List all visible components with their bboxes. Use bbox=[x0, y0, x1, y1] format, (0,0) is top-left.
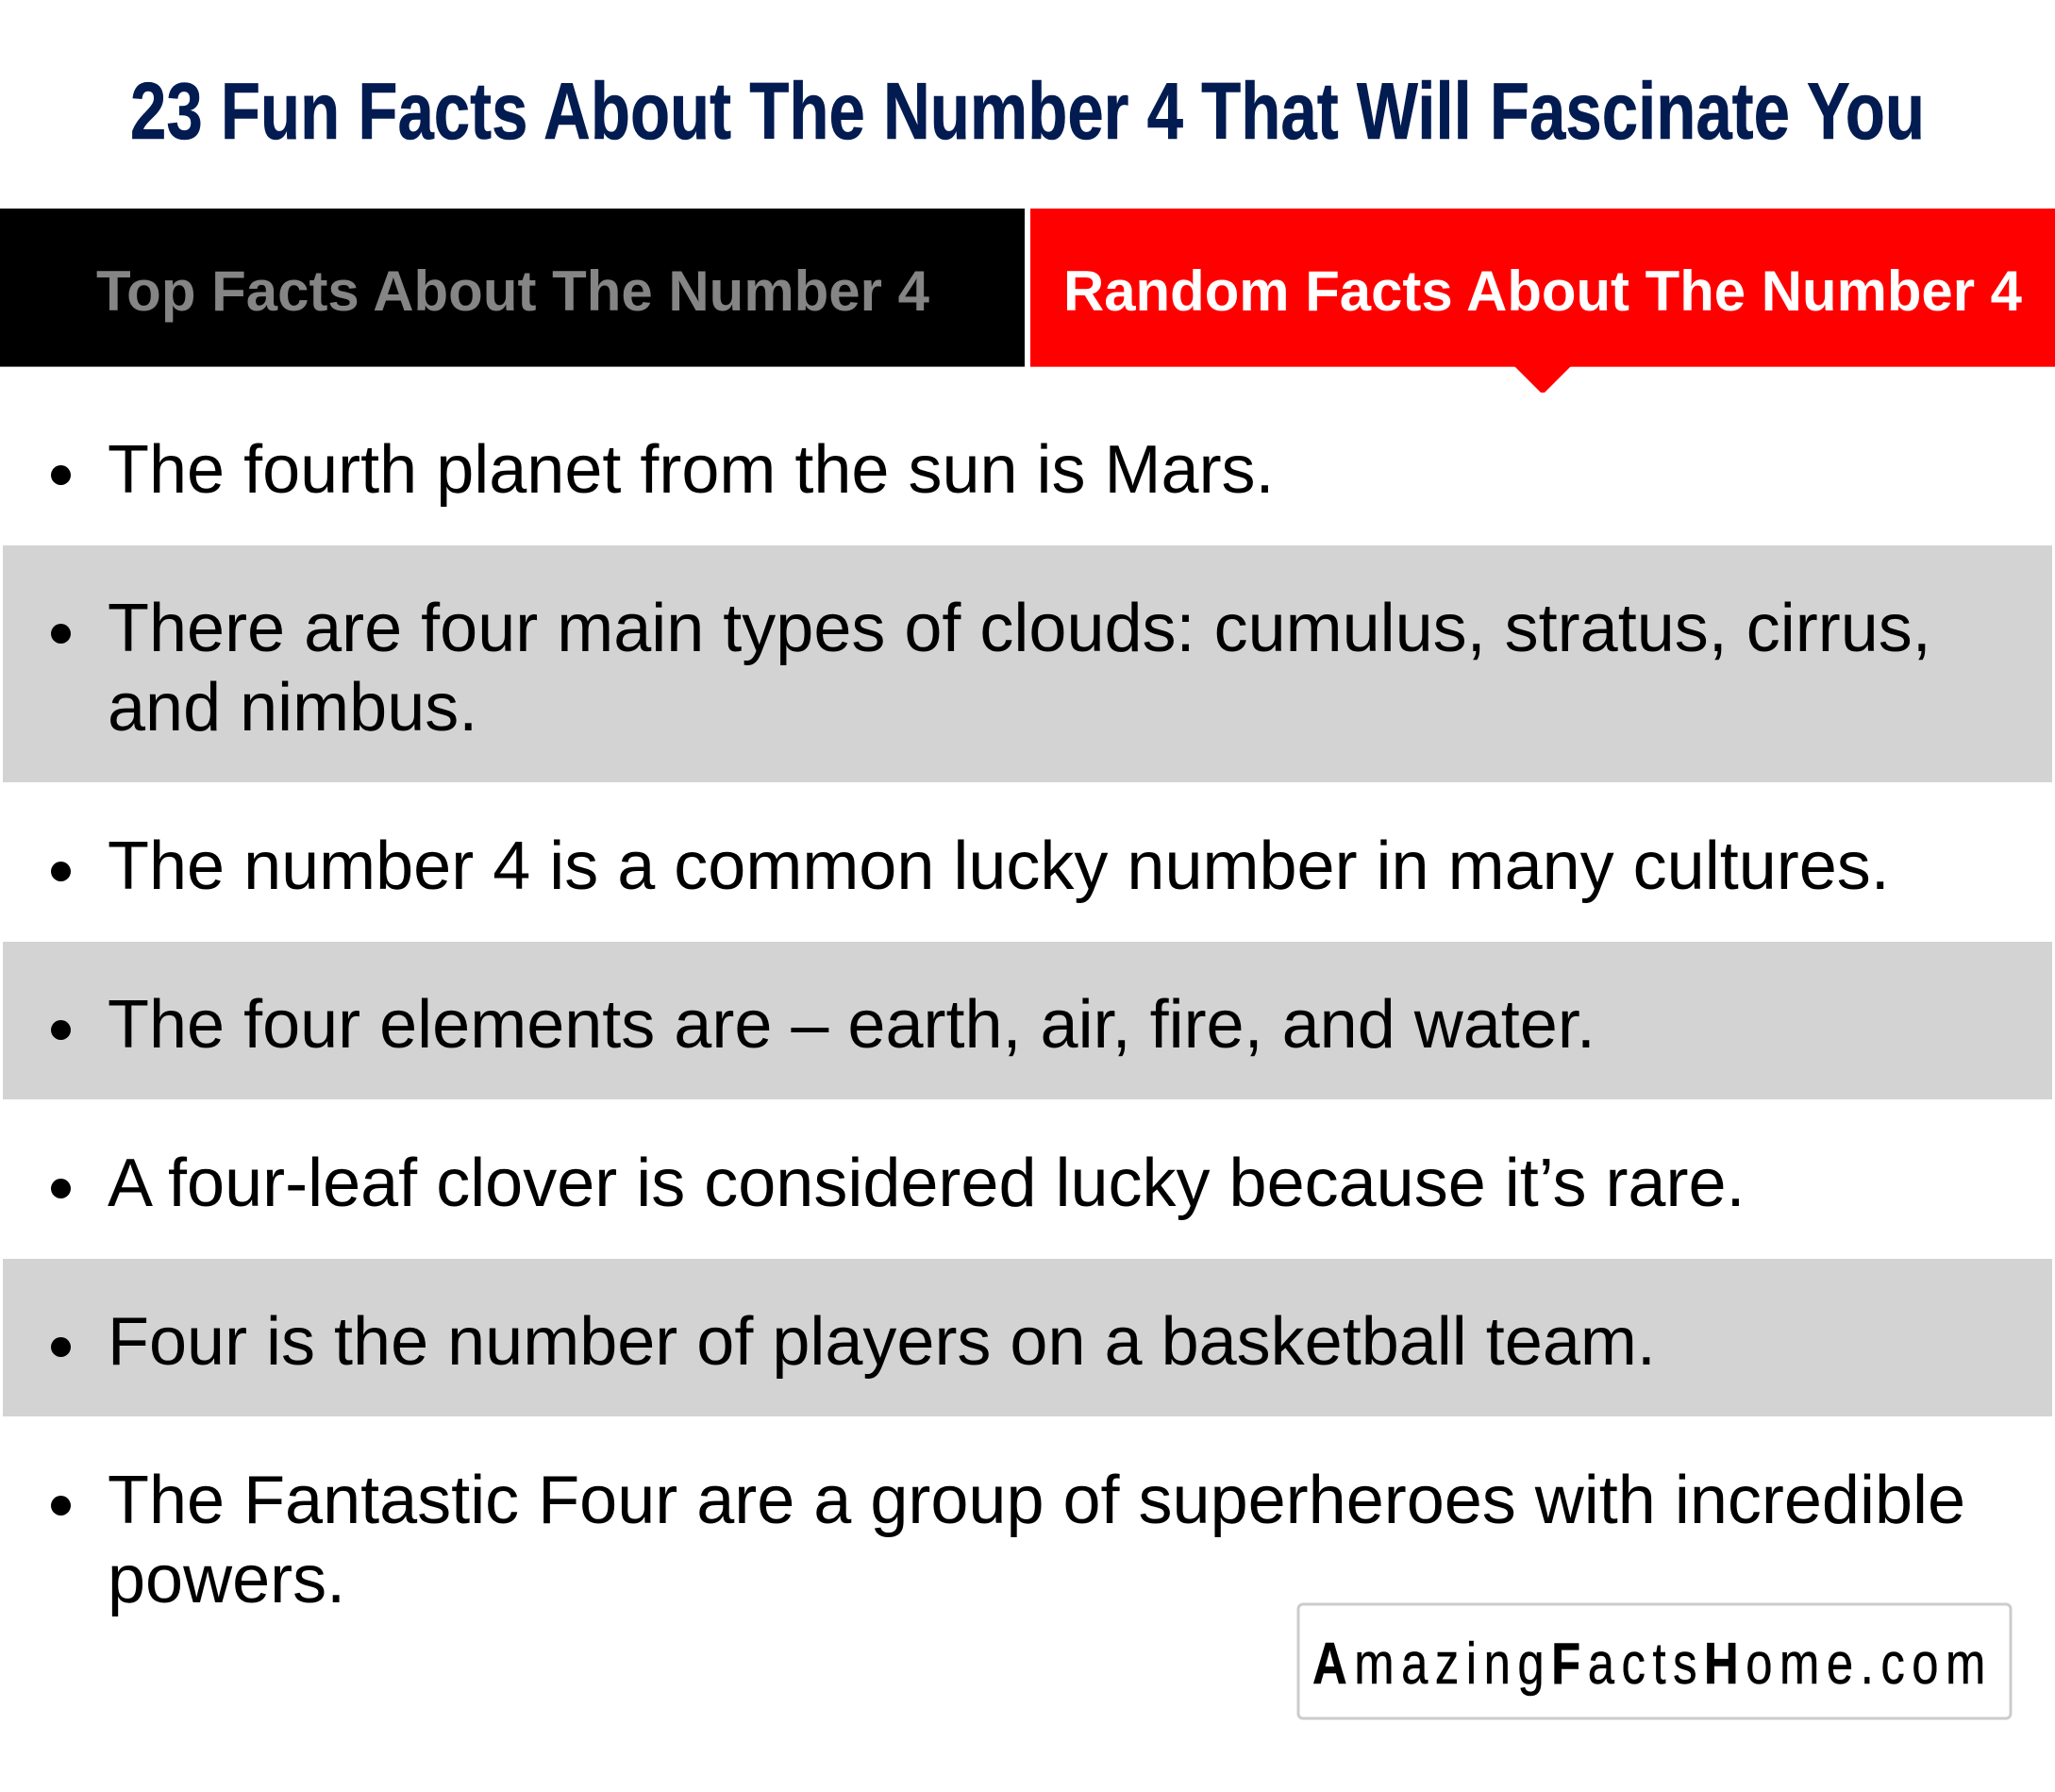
fact row 7: powers. bbox=[108, 1542, 345, 1617]
fact row 6: Four is the number of players on a basketball team. bbox=[108, 1304, 1656, 1380]
fact row 2: There are four main types of clouds: cumulus, stratus, cirrus, bbox=[108, 591, 1931, 666]
fact row 2: and nimbus. bbox=[108, 670, 477, 745]
tab: top facts (inactive) bbox=[0, 209, 1025, 367]
tab: random facts (active) bbox=[1030, 209, 2055, 393]
fact row 2 bbox=[3, 545, 2052, 782]
fact row 7: The Fantastic Four are a group of superheroes with incredible bbox=[108, 1463, 1965, 1538]
tab: top facts (inactive): Top Facts About The Number 4 bbox=[96, 260, 930, 323]
fact row 5: A four-leaf clover is considered lucky because it’s rare. bbox=[108, 1146, 1746, 1221]
logo: website name box: AmazingFactsHome.com bbox=[1312, 1632, 1985, 1697]
logo: website name box bbox=[1298, 1604, 2011, 1718]
fact row 4 bbox=[3, 942, 2052, 1099]
fact row 6 bbox=[3, 1259, 2052, 1416]
icon: tab pointer bbox=[1514, 366, 1571, 393]
fact row 4: The four elements are – earth, air, fire, and water. bbox=[108, 987, 1596, 1063]
tab: random facts (active): Random Facts About The Number 4 bbox=[1063, 260, 2023, 323]
fact row 1: The fourth planet from the sun is Mars. bbox=[108, 432, 1275, 508]
fact row 3: The number 4 is a common lucky number in many cultures. bbox=[108, 829, 1890, 904]
fact row 7 bbox=[51, 1463, 1965, 1617]
